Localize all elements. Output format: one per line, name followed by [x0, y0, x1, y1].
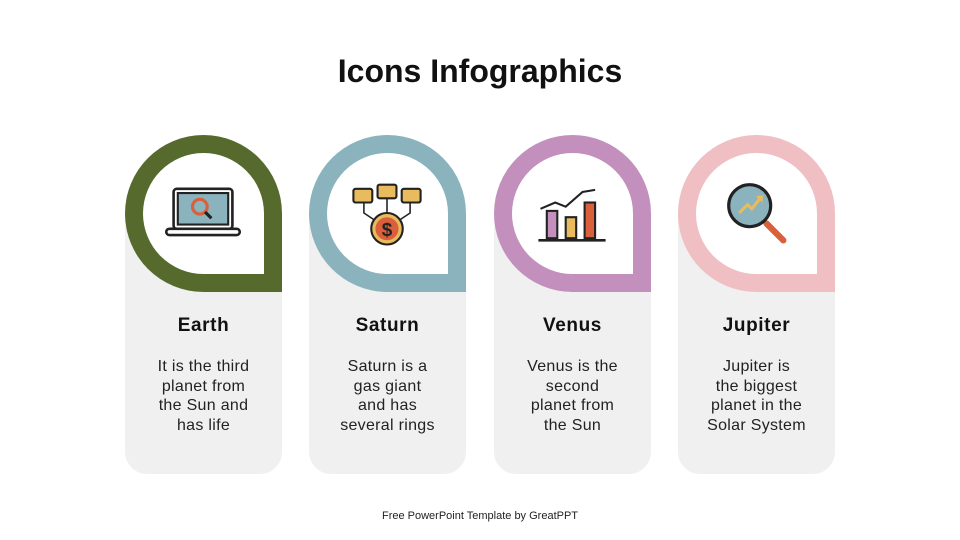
- text: venus: planet from: [531, 397, 614, 414]
- heading: jupiter: Jupiter: [723, 315, 790, 336]
- heading: saturn: Saturn: [356, 315, 419, 336]
- heading: earth: Earth: [178, 315, 229, 336]
- teardrop ring: jupiter: [678, 135, 835, 292]
- text: venus: Venus is the: [527, 358, 618, 375]
- text: jupiter: Solar System: [707, 416, 806, 434]
- title: Icons Infographics: [338, 53, 622, 89]
- text: jupiter: the biggest: [716, 378, 797, 394]
- text: jupiter: Jupiter is: [723, 358, 790, 375]
- text: saturn: and has: [358, 397, 417, 414]
- panel: earth: [125, 135, 282, 474]
- footer: Free PowerPoint Template by GreatPPT: [382, 510, 578, 522]
- text: jupiter: [707, 358, 806, 434]
- text: earth: planet from: [162, 378, 245, 394]
- text: earth: It is the third: [158, 358, 249, 375]
- text: saturn: [340, 358, 435, 434]
- text: saturn: Saturn is a: [348, 358, 427, 375]
- text: earth: the Sun and: [159, 397, 248, 414]
- teardrop ring: earth: [125, 135, 282, 292]
- text: saturn: several rings: [340, 416, 435, 434]
- panel: venus: [494, 135, 651, 474]
- text: saturn: gas giant: [354, 378, 421, 394]
- icon: money network: [352, 184, 422, 246]
- icon: bar chart: [538, 188, 606, 242]
- heading: venus: Venus: [543, 315, 602, 336]
- icon: magnifier growth: [727, 183, 786, 244]
- icon: money network: $: [382, 220, 393, 241]
- teardrop ring: venus: [494, 135, 651, 292]
- text: venus: the Sun: [544, 416, 601, 434]
- text: venus: second: [546, 378, 599, 394]
- panel: saturn: [309, 135, 466, 474]
- text: earth: has life: [177, 416, 230, 434]
- text: jupiter: planet in the: [711, 397, 802, 414]
- text: earth: [158, 358, 249, 434]
- teardrop ring: saturn: [309, 135, 466, 292]
- text: venus: [527, 358, 618, 434]
- panel: jupiter: [678, 135, 835, 474]
- icon: laptop search: [164, 188, 242, 236]
